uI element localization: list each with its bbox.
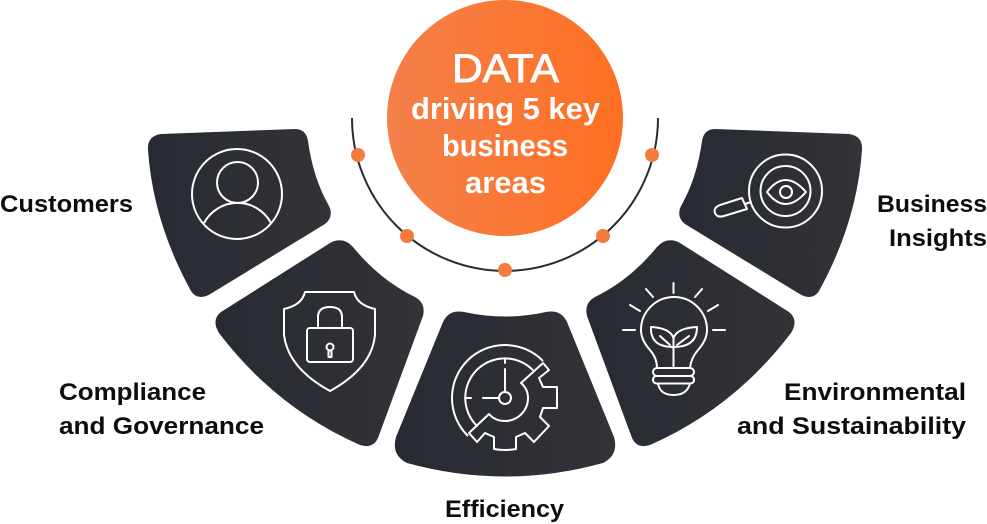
- panel: business insights: [679, 129, 862, 297]
- central circle: title: driving 5 key: [411, 92, 600, 126]
- label: compliance and governance: [59, 379, 264, 440]
- label: environmental and sustainability: Environmental: [784, 379, 966, 406]
- central circle: title: DATA: [452, 47, 559, 91]
- label: compliance and governance: Compliance: [59, 379, 206, 406]
- label: customers: Customers: [0, 191, 133, 218]
- central circle: title: [387, 0, 623, 236]
- label: environmental and sustainability: [737, 379, 966, 440]
- label: business insights: [877, 191, 987, 252]
- panel: efficiency: [395, 311, 615, 476]
- central circle: title: business: [442, 129, 568, 163]
- panel: customers: [148, 129, 331, 297]
- panel: compliance and governance: [215, 240, 424, 446]
- icon: shield with padlock: [284, 292, 375, 391]
- label: business insights: Business: [877, 191, 987, 218]
- arc connecting the key areas: [351, 118, 659, 277]
- label: environmental and sustainability: and Sustainability: [737, 413, 966, 440]
- icon: magnifier with eye: [715, 154, 822, 228]
- central circle: title: areas: [465, 166, 546, 200]
- label: efficiency: Efficiency: [445, 496, 564, 523]
- label: business insights: Insights: [889, 225, 987, 252]
- icon: person: [192, 149, 282, 239]
- label: compliance and governance: and Governance: [59, 413, 264, 440]
- icon: gear with clock: [452, 345, 557, 450]
- icon: light bulb with plant: [623, 283, 725, 395]
- panel: environmental and sustainability: [586, 240, 795, 446]
